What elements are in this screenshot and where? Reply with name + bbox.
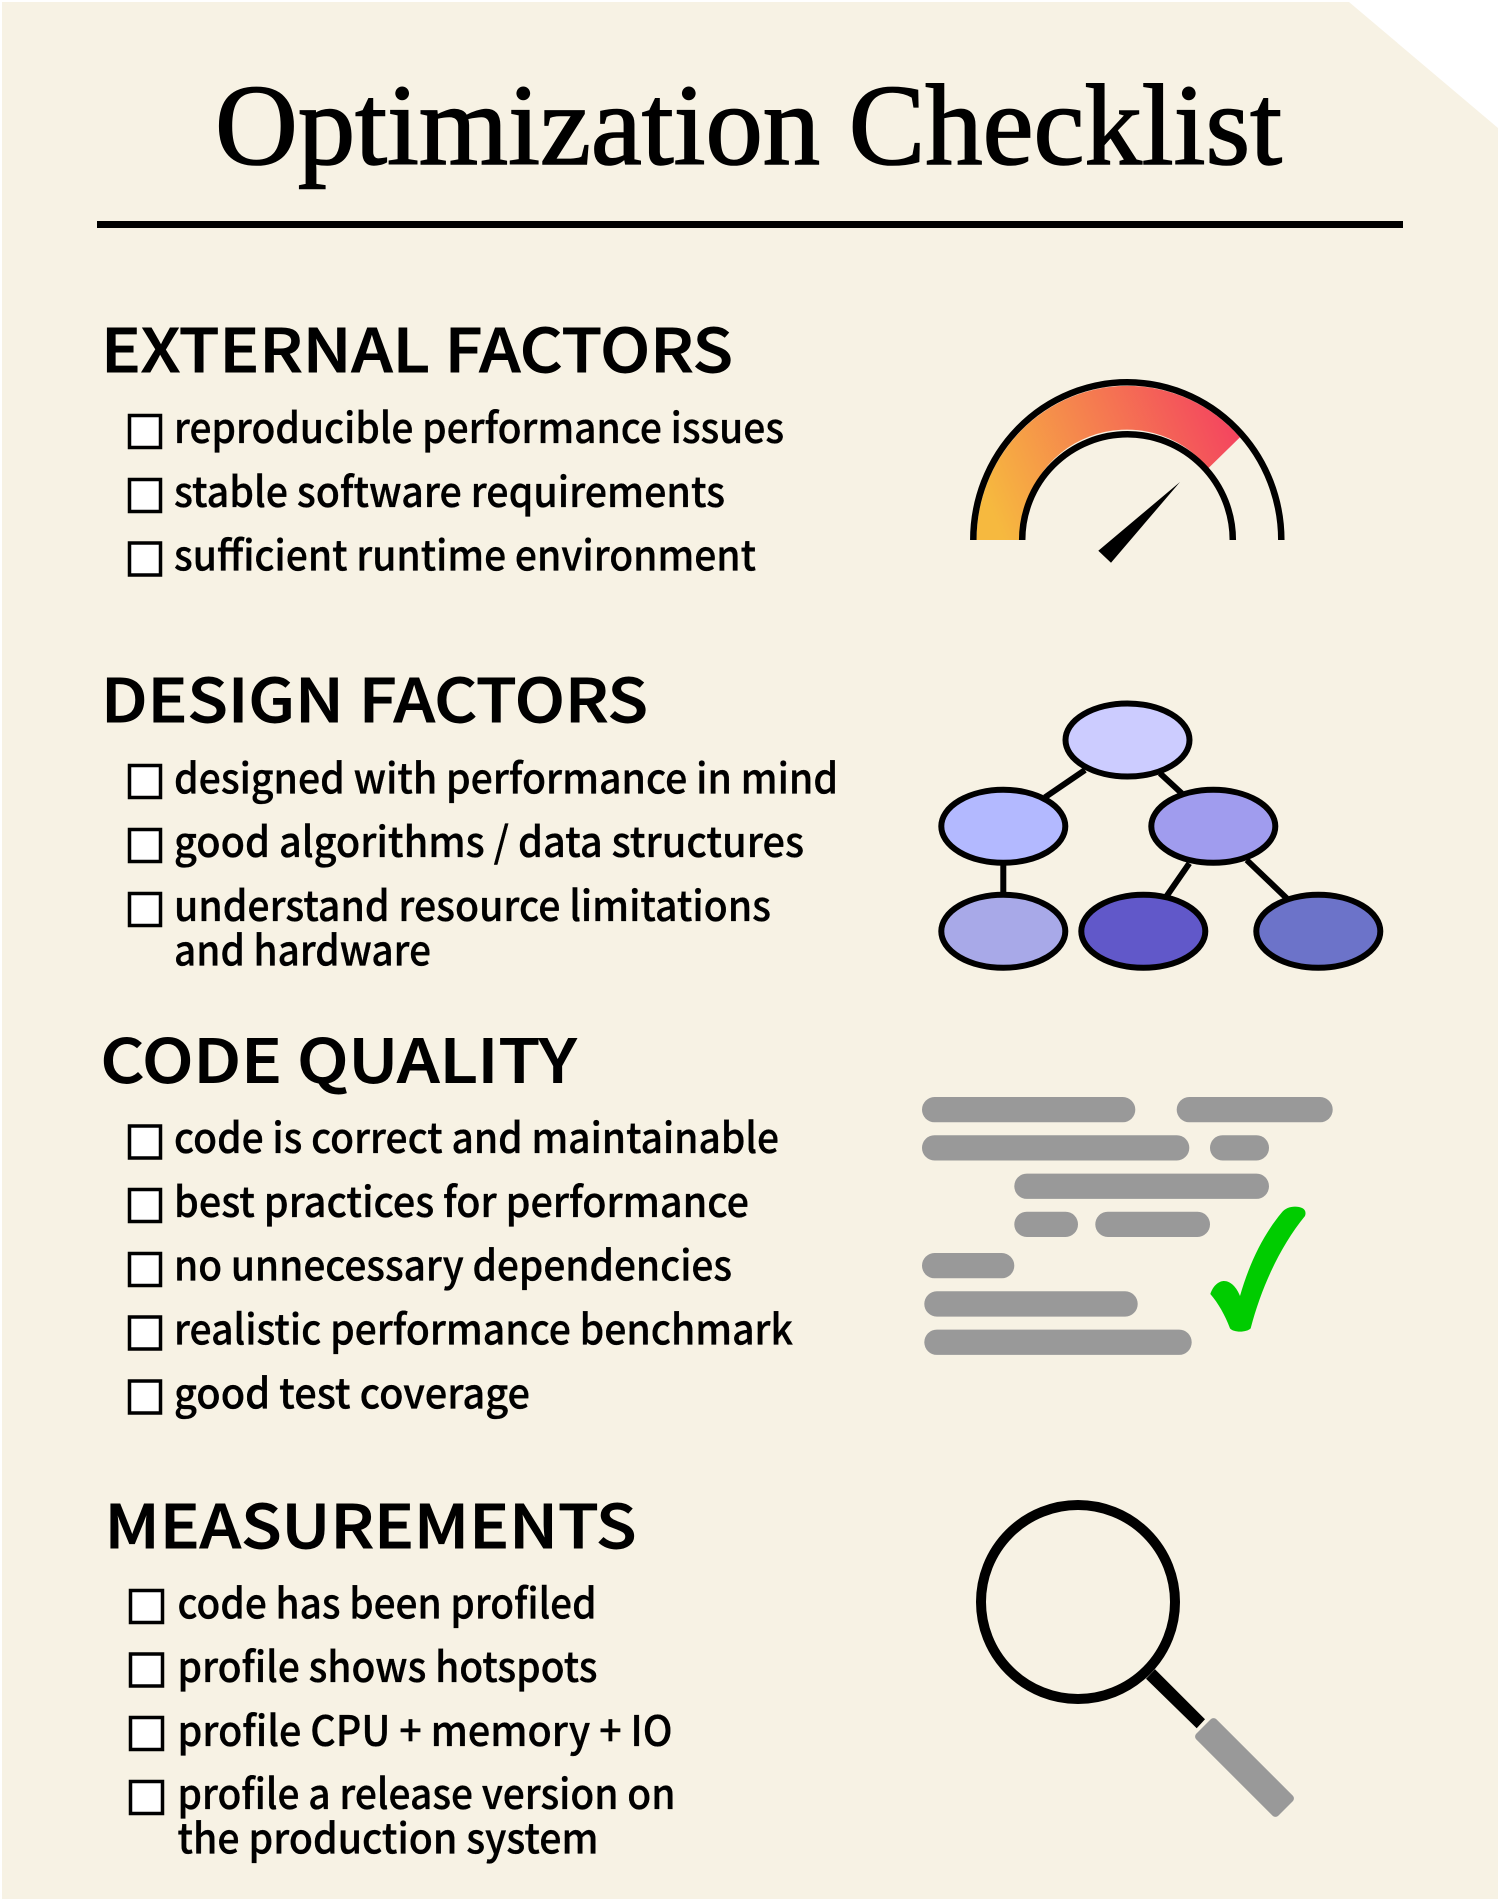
checklist item: good algorithms / data structures: good algorithms / data structures	[174, 809, 804, 870]
checklist item: understand resource limitations and hardware	[130, 873, 771, 978]
checklist item: sufficient runtime environment: sufficient runtime environment	[174, 522, 756, 584]
checklist item: code has been profiled: code has been profiled	[178, 1570, 596, 1632]
checklist item: profile a release version on the production system: profile a release version on	[178, 1761, 676, 1822]
checklist item: no unnecessary dependencies: no unnecessary dependencies	[174, 1232, 732, 1294]
heading: external factors: EXTERNAL FACTORS	[101, 303, 733, 390]
heading: design factors: DESIGN FACTORS	[101, 653, 648, 740]
icon: magnifying glass	[981, 1505, 1296, 1819]
checklist item: understand resource limitations and hardware: and hardware	[174, 918, 431, 978]
checklist item: realistic performance benchmark: realistic performance benchmark	[174, 1296, 793, 1358]
icon: tree diagram	[941, 704, 1380, 968]
checklist item: understand resource limitations and hardware: understand resource limitations	[174, 873, 771, 934]
panel: external factors	[101, 303, 784, 584]
panel: design factors	[101, 653, 838, 978]
checklist item: best practices for performance: best practices for performance	[174, 1169, 749, 1230]
panel: measurements	[104, 1479, 676, 1866]
panel: code quality	[100, 1014, 793, 1422]
checklist item: profile a release version on the production system: the production system	[178, 1806, 598, 1866]
title underline	[97, 221, 1403, 228]
checklist item: designed with performance in mind: designed with performance in mind	[174, 746, 838, 806]
checklist item: profile shows hotspots: profile shows hotspots	[178, 1634, 598, 1695]
title: Optimization Checklist	[215, 62, 1282, 190]
icon: code lines with check mark	[922, 1097, 1333, 1355]
heading: code quality: CODE QUALITY	[100, 1014, 577, 1100]
icon: speedometer gauge	[973, 382, 1281, 563]
checklist item: reproducible performance issues: reproducible performance issues	[174, 395, 784, 456]
checklist item: good test coverage: good test coverage	[174, 1360, 530, 1422]
checklist item: code is correct and maintainable: code is correct and maintainable	[174, 1105, 779, 1166]
checklist item: stable software requirements: stable software requirements	[174, 459, 725, 520]
heading: measurements: MEASUREMENTS	[104, 1479, 636, 1566]
checklist item: profile a release version on the production system	[130, 1761, 676, 1866]
checklist item: profile CPU + memory + IO: profile CPU + memory + IO	[178, 1698, 672, 1759]
